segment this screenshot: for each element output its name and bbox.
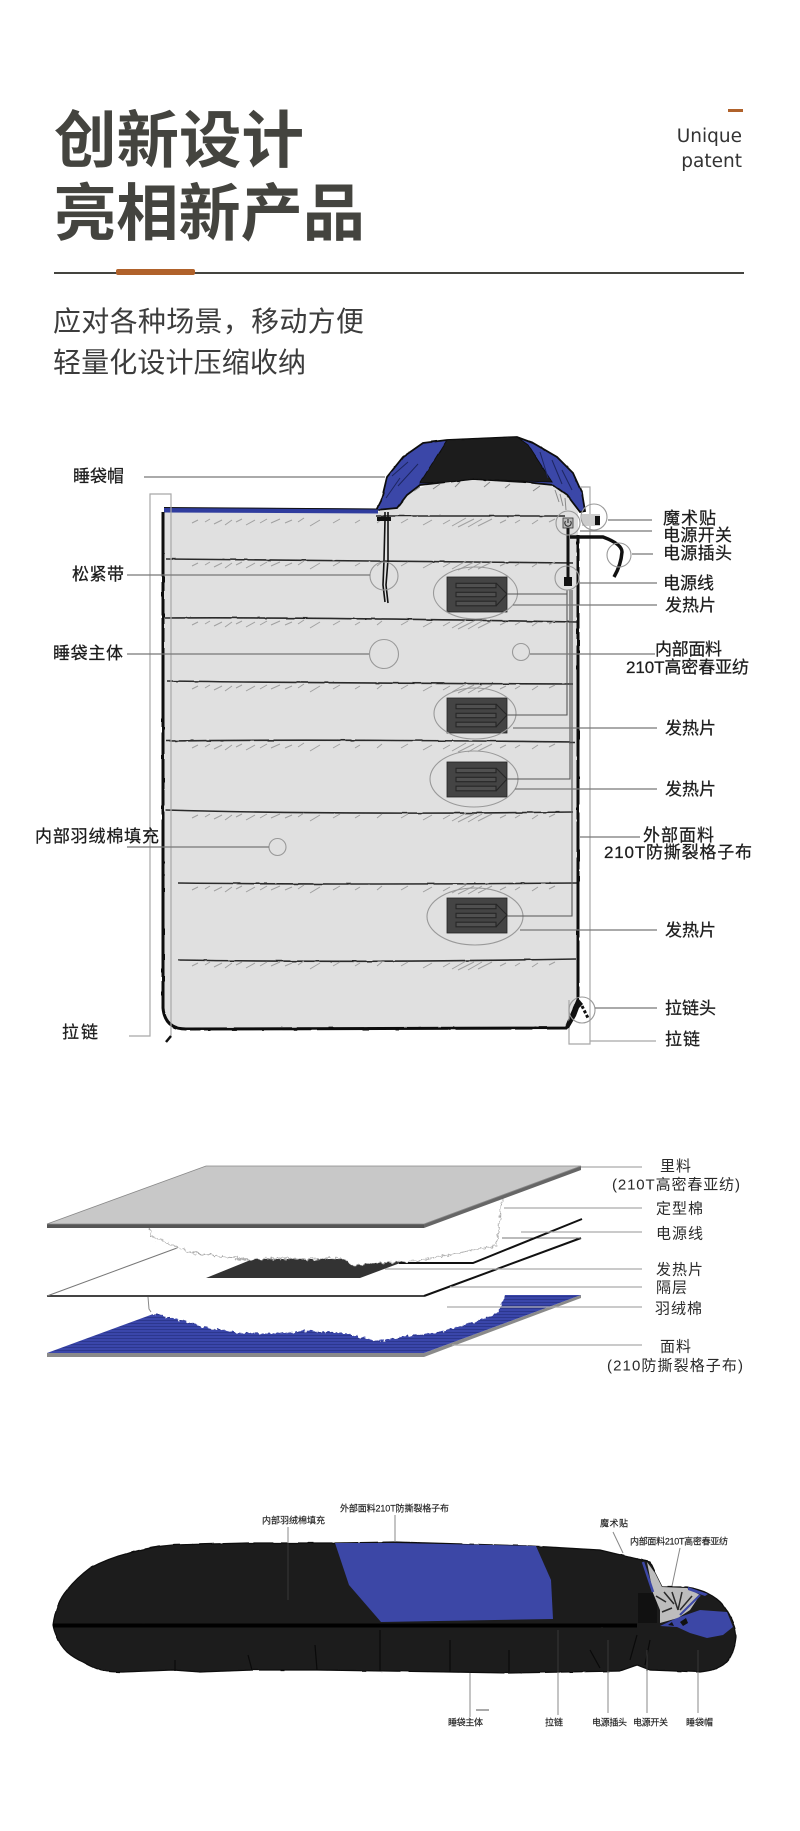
side view labels: 内部面料210T高密春亚纺 <box>630 1536 728 1546</box>
layer leader lines <box>385 1167 642 1345</box>
hood blue panel <box>660 1587 733 1638</box>
layer labels: 里料 <box>660 1158 691 1175</box>
sleeping bag body <box>163 437 585 1029</box>
zipper brackets <box>129 487 656 1044</box>
side view labels: 电源插头 <box>592 1716 627 1728</box>
quilting lines <box>165 516 577 961</box>
english tag: patent <box>681 151 742 172</box>
hood opening <box>638 1562 700 1623</box>
side view labels: 外部面料210T防撕裂格子布 <box>340 1502 449 1514</box>
subtitle: 应对各种场景，移动方便 <box>53 306 364 337</box>
power plug cable <box>555 537 631 590</box>
layer labels: (210防撕裂格子布) <box>607 1358 743 1374</box>
hood <box>376 437 585 512</box>
wiring <box>507 527 572 916</box>
panel: sleeping bag structure diagram <box>35 437 752 1049</box>
layer labels <box>607 1158 743 1374</box>
title: 亮相新产品 <box>54 180 365 249</box>
lining layer <box>47 1166 581 1228</box>
fabric layer: blue shell <box>47 1295 581 1357</box>
bag silhouette <box>53 1542 736 1673</box>
labels: right: 发热片 <box>665 921 716 940</box>
side view labels: 拉链 <box>545 1716 563 1728</box>
layer labels: 电源线 <box>656 1226 703 1242</box>
labels: left: 拉链 <box>62 1023 98 1042</box>
labels: right: 内部面料 <box>655 640 722 659</box>
labels: left: 内部羽绒棉填充 <box>35 827 159 846</box>
inner fabric markers <box>269 562 530 856</box>
layer labels: 羽绒棉 <box>655 1300 702 1318</box>
labels: left: 松紧带 <box>72 565 124 584</box>
labels: right: 发热片 <box>665 719 716 738</box>
labels: right: 发热片 <box>665 596 716 615</box>
panel: layer structure diagram <box>47 1158 743 1374</box>
labels: right: 210T防撕裂格子布 <box>604 843 752 862</box>
subtitle <box>53 306 364 378</box>
quilting texture <box>192 518 555 970</box>
labels: right: 拉链 <box>665 1030 700 1049</box>
layer labels: 定型棉 <box>656 1200 703 1218</box>
labels: right: 210T高密春亚纺 <box>626 658 749 677</box>
english tag <box>677 126 742 172</box>
labels: right: 发热片 <box>665 780 716 799</box>
labels: right: 电源开关 <box>663 526 732 545</box>
labels: right <box>604 509 752 1049</box>
side view leader lines <box>288 1515 698 1717</box>
title: 创新设计 <box>54 107 304 176</box>
side view labels: 魔术贴 <box>600 1518 628 1528</box>
zipper head <box>166 997 595 1042</box>
labels: right: 拉链头 <box>665 999 716 1018</box>
panel: side view of sleeping bag <box>53 1502 736 1728</box>
side view labels: 睡袋主体 <box>448 1716 483 1728</box>
outline <box>163 512 578 1029</box>
heading rule <box>54 269 744 275</box>
layer labels: (210T高密春亚纺) <box>612 1176 740 1194</box>
velcro <box>581 504 607 530</box>
power switch <box>556 511 580 535</box>
layer labels: 隔层 <box>656 1280 687 1296</box>
labels: left <box>35 467 159 1042</box>
blue top edge <box>164 510 378 511</box>
heating sheet layer <box>206 1259 411 1278</box>
lower folds <box>175 1630 650 1672</box>
labels: right: 电源插头 <box>663 544 732 563</box>
heating pads <box>427 567 523 945</box>
blue panel <box>335 1543 553 1622</box>
labels: right: 外部面料 <box>643 826 714 845</box>
english tag: Unique <box>677 126 742 147</box>
labels: right: 魔术贴 <box>663 509 716 528</box>
shaped cotton layer <box>150 1170 502 1265</box>
title <box>54 107 365 249</box>
side view labels: 内部羽绒棉填充 <box>262 1514 325 1526</box>
heading block <box>53 107 744 378</box>
accent tick <box>728 109 743 112</box>
drawcord <box>377 512 391 603</box>
divider layer <box>47 1238 581 1296</box>
layer labels: 发热片 <box>656 1262 703 1278</box>
main zipper <box>53 1624 637 1627</box>
side view labels: 睡袋帽 <box>686 1716 713 1728</box>
side view labels: 电源开关 <box>633 1716 668 1728</box>
leader lines <box>127 477 657 1008</box>
layer labels: 面料 <box>660 1338 691 1356</box>
subtitle: 轻量化设计压缩收纳 <box>53 347 306 378</box>
labels: left: 睡袋帽 <box>73 467 124 486</box>
down fill layer <box>148 1272 507 1340</box>
power cable layer <box>399 1219 582 1263</box>
small dash mark <box>476 1709 489 1711</box>
labels: right: 电源线 <box>663 574 714 593</box>
labels: left: 睡袋主体 <box>53 644 123 663</box>
side view labels <box>262 1502 728 1728</box>
